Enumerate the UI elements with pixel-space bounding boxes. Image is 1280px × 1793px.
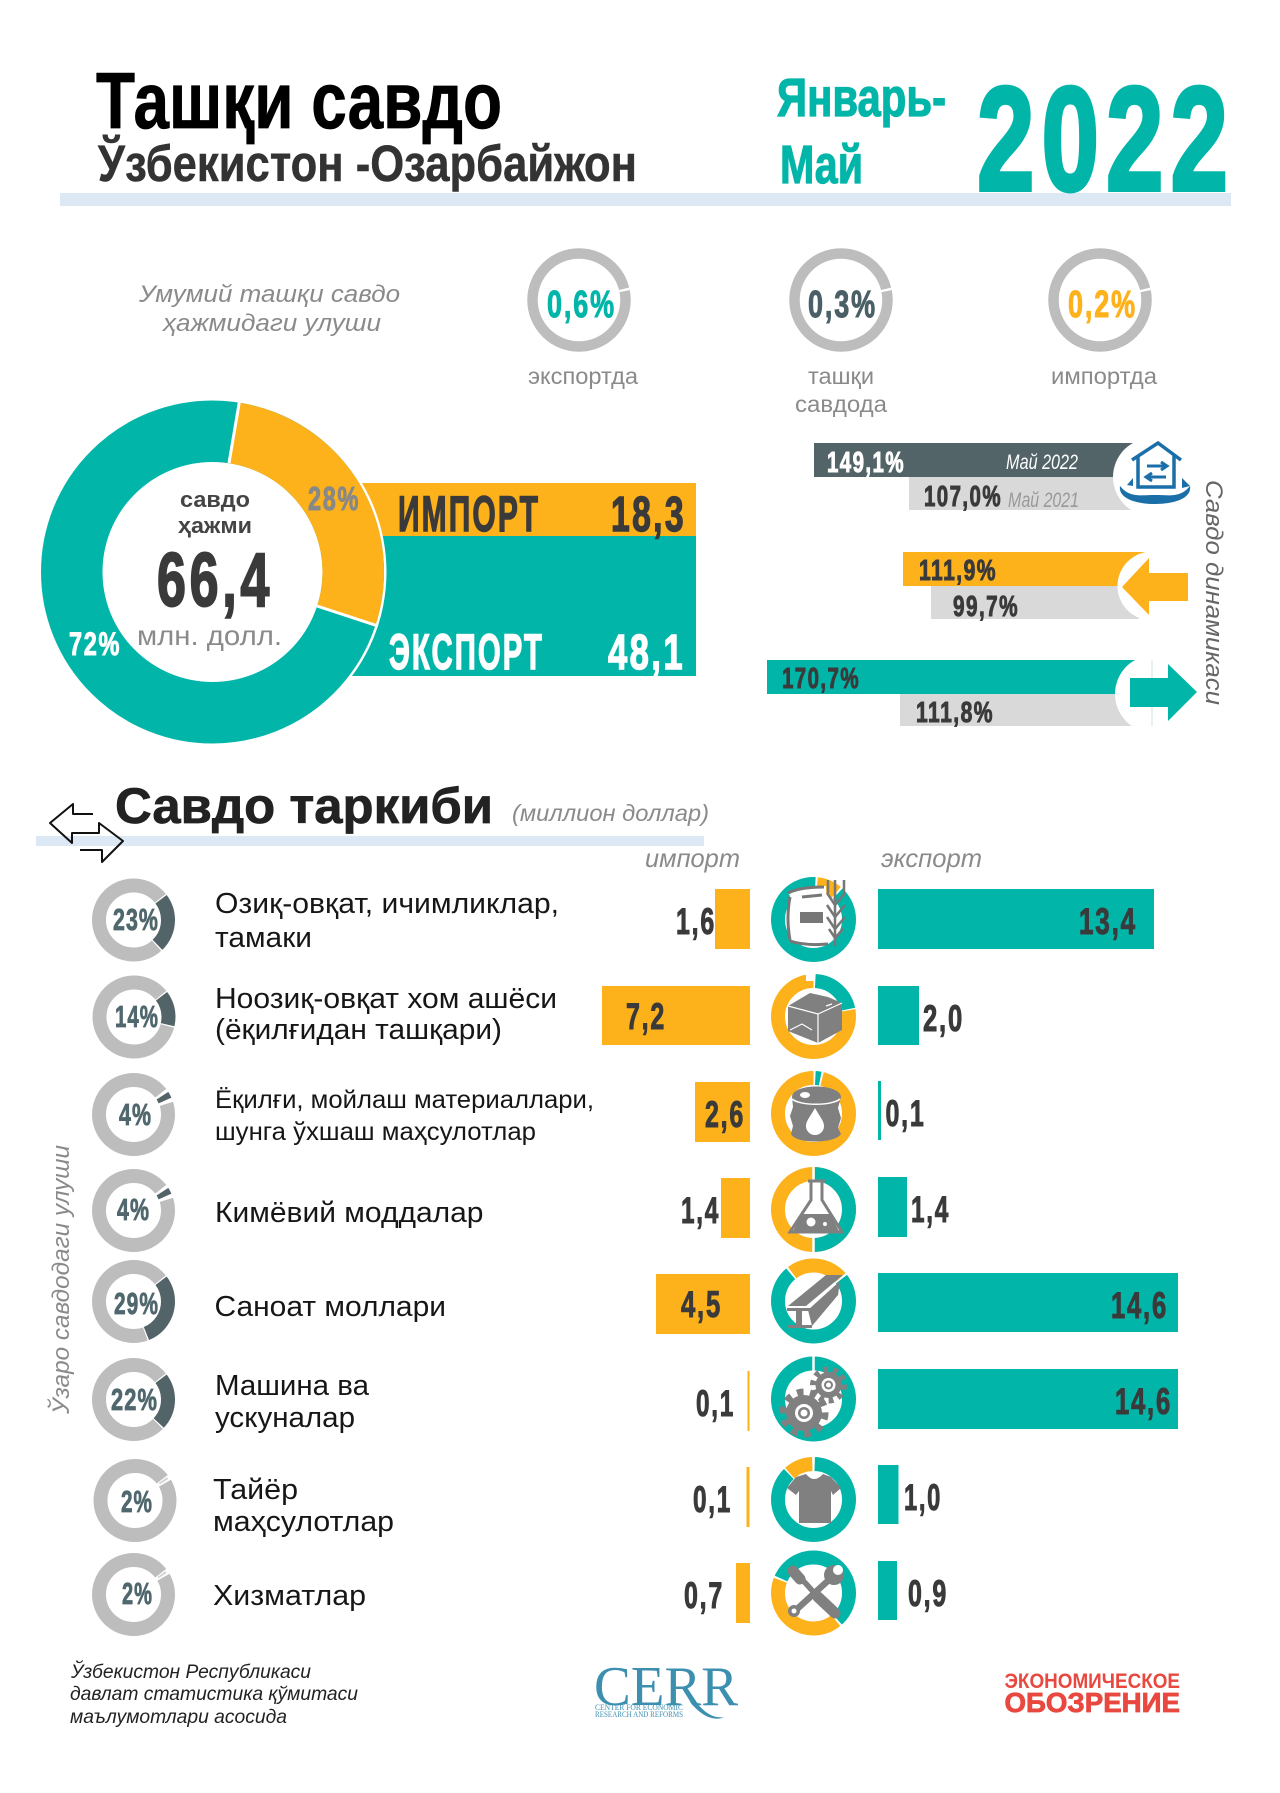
dynamics: total <box>814 438 1191 516</box>
share ring 14% <box>100 982 168 1052</box>
category label: шунга ўхшаш маҳсулотлар <box>215 1118 536 1146</box>
category label: (ёқилғидан ташқари) <box>215 1014 502 1046</box>
donut centre text: млн. долл. <box>137 620 282 651</box>
donut percent labels: 72% <box>69 626 121 662</box>
import bar: 1,4 <box>681 1190 720 1231</box>
share ring 23% <box>99 886 168 954</box>
dynamics: total: Май 2022 <box>1006 451 1078 474</box>
donut centre text: 66,4 <box>157 538 273 623</box>
row: industrial goods <box>99 1266 1178 1336</box>
share ring: export <box>528 254 638 389</box>
arrow: export <box>1130 664 1197 721</box>
category label: Машина ва <box>215 1370 370 1402</box>
title: Ташқи савдо <box>96 56 502 145</box>
import bar: 2,6 <box>705 1094 745 1135</box>
import bar: 1,6 <box>676 901 716 942</box>
category label <box>215 1370 370 1434</box>
dynamics: total: 107,0% <box>924 481 1002 513</box>
period: Январь- <box>777 68 946 128</box>
category label <box>213 1474 394 1538</box>
header <box>60 56 1235 222</box>
dynamics: total: 149,1% <box>827 447 905 479</box>
donut centre text <box>137 487 282 651</box>
source note: маълумотлари асосида <box>70 1707 287 1728</box>
import column header: импорт <box>645 843 740 873</box>
share ring 2%: 2% <box>122 1576 153 1611</box>
share ring: total trade: 0,3% <box>808 284 877 326</box>
import bar: 0,1 <box>693 1479 732 1520</box>
icon: house with trade arrows <box>1120 443 1190 504</box>
category label <box>215 1086 594 1146</box>
share ring: total trade: ташқи <box>808 363 874 389</box>
share ring 22% <box>99 1365 168 1434</box>
share ring 2%: 2% <box>121 1484 153 1519</box>
share ring 2% <box>99 1560 168 1629</box>
export bar: 1,4 <box>911 1189 950 1230</box>
dynamics: import: 111,9% <box>919 555 997 587</box>
category label: Тайёр <box>213 1474 298 1506</box>
category label: Саноат моллари <box>214 1291 446 1323</box>
icon: flask <box>778 1166 849 1253</box>
logo: CERR: RESEARCH AND REFORMS <box>595 1710 683 1719</box>
panel: trade dynamics <box>767 438 1227 733</box>
dynamics: import <box>903 552 1186 623</box>
row: finished goods <box>100 1464 942 1538</box>
subtitle: Ўзбекистон -Озарбайжон <box>97 134 637 192</box>
share ring 4% <box>99 1080 168 1149</box>
share ring 29%: 29% <box>114 1286 159 1321</box>
logo: CERR: CENTER FOR ECONOMIC <box>595 1703 683 1712</box>
share ring 14%: 14% <box>115 999 159 1034</box>
share ring: export: экспортда <box>528 363 638 389</box>
icon: sack and wheat <box>778 880 849 955</box>
row: fuel and lubricants <box>99 1078 926 1149</box>
import bar: 0,7 <box>684 1575 724 1616</box>
share ring 4%: 4% <box>117 1192 150 1227</box>
row: non-food raw materials <box>100 981 964 1052</box>
share ring 4%: 4% <box>119 1097 152 1132</box>
import bar: 7,2 <box>626 996 666 1037</box>
category label: Кимёвий моддалар <box>215 1197 484 1229</box>
icon: double arrows <box>50 804 123 862</box>
dynamics: export: 170,7% <box>782 663 860 695</box>
source note <box>70 1661 358 1728</box>
import bar <box>656 1274 750 1334</box>
section heading <box>36 778 982 873</box>
import bar: 0,1 <box>696 1383 735 1424</box>
units note: (миллион доллар) <box>512 800 709 826</box>
dynamics axis label: Савдо динамикаси <box>1200 480 1227 705</box>
export bar <box>878 1465 942 1524</box>
row: chemicals <box>99 1166 950 1253</box>
export bar: 14,6 <box>1111 1285 1168 1326</box>
logo: Economic Review <box>1004 1670 1180 1718</box>
donut centre text: савдо <box>180 487 250 512</box>
import bar <box>602 986 750 1045</box>
export bar: 13,4 <box>1079 901 1137 942</box>
export bar: 14,6 <box>1115 1381 1172 1422</box>
category label: Ёқилғи, мойлаш материаллари, <box>215 1086 594 1114</box>
import label: ИМПОРТ <box>398 486 540 542</box>
row: food <box>99 880 1154 955</box>
mutual trade share axis label: Ўзаро савдодаги улуши <box>46 1145 75 1415</box>
icon: raw material block <box>778 981 849 1052</box>
export bar: 1,0 <box>904 1477 942 1518</box>
category label: тамаки <box>215 922 312 954</box>
export bar: 0,1 <box>886 1093 926 1134</box>
import bar <box>684 1563 750 1623</box>
import bar <box>681 1178 750 1238</box>
donut percent labels <box>69 480 360 662</box>
export column header: экспорт <box>881 843 982 873</box>
share ring: export: 0,6% <box>547 284 616 326</box>
category label <box>215 888 559 954</box>
share ring: import: 0,2% <box>1068 284 1137 326</box>
export label: 48,1 <box>608 626 685 680</box>
row: machinery <box>99 1356 1178 1434</box>
dynamics: import: 99,7% <box>953 591 1019 623</box>
share ring: total trade: савдода <box>795 391 887 417</box>
header divider <box>60 193 1231 206</box>
section title: Савдо таркиби <box>115 778 493 834</box>
panel: trade volume <box>38 398 696 746</box>
import bar: 4,5 <box>681 1284 722 1325</box>
donut centre text: ҳажми <box>178 513 252 538</box>
category label: ускуналар <box>215 1402 355 1434</box>
icon: gears <box>778 1356 849 1434</box>
logo: CERR: CERR <box>594 1656 739 1718</box>
logo: Economic Review: ОБОЗРЕНИЕ <box>1004 1687 1180 1718</box>
section divider <box>36 836 704 846</box>
icon: oil barrel <box>778 1078 849 1149</box>
share ring: total trade <box>794 254 888 417</box>
share caption: ҳажмидаги улуши <box>162 310 381 337</box>
export bar: 0,9 <box>908 1573 948 1614</box>
export bar <box>300 536 696 676</box>
logo: Economic Review: ЭКОНОМИЧЕСКОЕ <box>1004 1670 1180 1693</box>
export bar <box>878 986 964 1045</box>
share ring: import <box>1051 254 1157 389</box>
row: services <box>99 1558 948 1629</box>
import bar <box>696 1371 750 1431</box>
share ring 22%: 22% <box>111 1382 158 1417</box>
export bar <box>878 1177 950 1237</box>
share ring 23%: 23% <box>113 902 159 937</box>
share ring 4% <box>99 1176 168 1245</box>
export label: ЭКСПОРТ <box>389 624 544 680</box>
export bar <box>878 889 1154 949</box>
export bar <box>878 1369 1178 1429</box>
import bar <box>676 889 750 949</box>
donut percent labels: 28% <box>308 480 360 517</box>
import bar <box>693 1467 750 1527</box>
category label: маҳсулотлар <box>213 1506 394 1538</box>
period: Май <box>780 135 863 195</box>
share caption: Умумий ташқи савдо <box>138 281 400 308</box>
category label: Озиқ-овқат, ичимликлар, <box>215 888 559 920</box>
dynamics: total: Май 2021 <box>1008 489 1079 512</box>
icon: tools <box>778 1558 849 1628</box>
import bar <box>695 1082 750 1142</box>
import label: 18,3 <box>611 488 686 542</box>
dynamics: export <box>767 655 1193 733</box>
period <box>777 68 946 195</box>
source note: давлат статистика қўмитаси <box>70 1684 358 1705</box>
arrow: import <box>1122 558 1188 615</box>
category label <box>215 983 557 1046</box>
category label: Хизматлар <box>213 1580 366 1612</box>
export bar: 2,0 <box>923 998 964 1039</box>
dynamics: export: 111,8% <box>916 697 994 729</box>
import bar <box>330 483 696 536</box>
share ring: import: импортда <box>1051 363 1157 389</box>
export bar <box>878 1561 948 1620</box>
icon: steel beam <box>778 1266 849 1336</box>
share caption <box>138 281 400 337</box>
source note: Ўзбекистон Республикаси <box>70 1661 311 1683</box>
category label: Ноозиқ-овқат хом ашёси <box>215 983 557 1015</box>
export bar <box>878 1081 926 1140</box>
share ring 2% <box>100 1466 170 1535</box>
export bar <box>878 1273 1178 1332</box>
donut chart <box>38 398 386 746</box>
icon: t-shirt <box>778 1464 849 1535</box>
share ring 29% <box>99 1267 168 1336</box>
